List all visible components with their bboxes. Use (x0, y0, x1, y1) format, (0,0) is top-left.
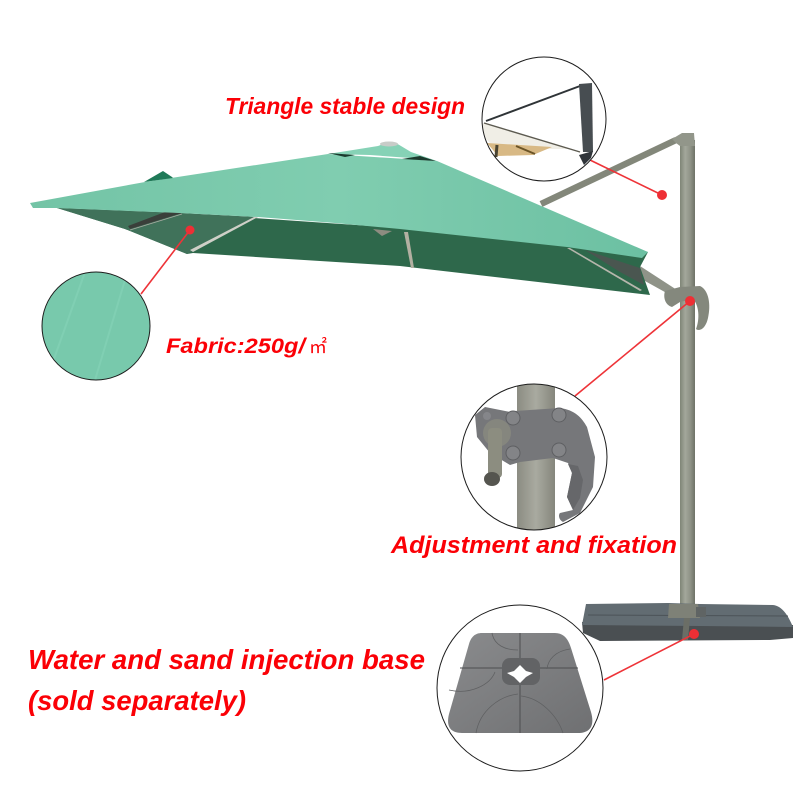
tilt clamp (664, 286, 709, 330)
label (28, 644, 425, 716)
leader dot (685, 296, 695, 306)
leader dot (689, 629, 699, 639)
callout: fabric (40, 226, 327, 382)
callout: base (28, 605, 699, 771)
top vent (328, 143, 437, 161)
label: Fabric:250g/ (166, 335, 307, 358)
pole (680, 140, 695, 610)
base detail (448, 633, 592, 733)
label: Triangle stable design (225, 93, 465, 119)
canopy ribs (128, 212, 182, 229)
leader line (590, 160, 662, 195)
label line 2: (sold separately) (28, 685, 246, 716)
hub (373, 229, 392, 236)
label (166, 333, 327, 359)
umbrella canopy (30, 142, 650, 295)
pole collar (668, 604, 700, 618)
lower arm (630, 263, 677, 296)
pole top cap (672, 133, 695, 146)
label: Adjustment and fixation (390, 532, 677, 559)
callout: adjustment (390, 296, 695, 559)
triangle detail (482, 83, 593, 165)
canopy top (30, 154, 648, 258)
leader dot (186, 226, 194, 234)
label line 1: Water and sand injection base (28, 644, 425, 675)
leader line (141, 230, 190, 294)
fabric swatch (40, 270, 152, 382)
clamp detail (475, 380, 595, 535)
leader dot (657, 190, 667, 200)
label: ㎡ (309, 333, 327, 359)
callout: triangle design (225, 55, 667, 200)
leader line (604, 634, 694, 680)
leader line (575, 301, 690, 396)
umbrella stand (541, 133, 793, 641)
upper support arm (541, 140, 676, 204)
vent flap left (144, 171, 173, 182)
water base (582, 603, 793, 641)
canopy underside (57, 208, 650, 295)
